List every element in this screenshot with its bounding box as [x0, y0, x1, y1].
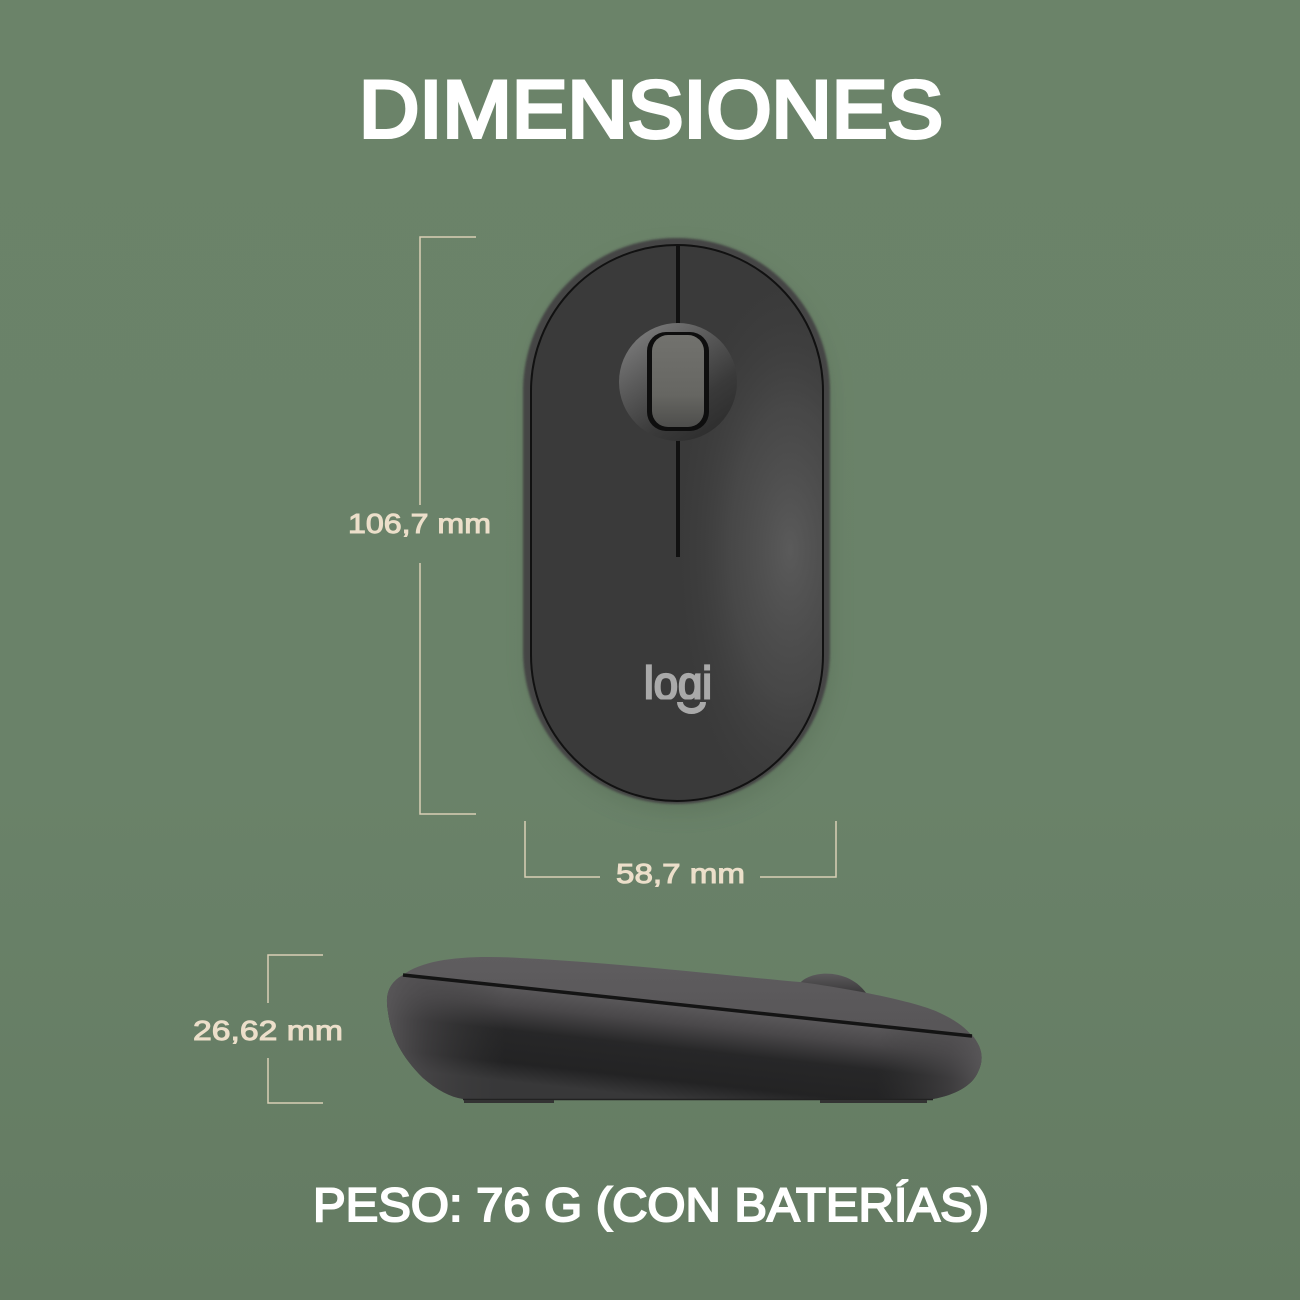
centre seam [676, 246, 680, 557]
wheel bump [798, 974, 868, 996]
side view mouse [380, 957, 990, 1105]
scroll wheel [652, 335, 704, 427]
seam line [403, 975, 972, 1036]
base line [463, 1098, 933, 1100]
top view mouse [522, 236, 832, 806]
shell highlight [718, 374, 822, 726]
shell outline [531, 245, 823, 801]
top shell [403, 957, 972, 1036]
thickness dimension bracket [268, 955, 323, 1103]
height label: 106,7 mm [348, 508, 491, 539]
width label: 58,7 mm [616, 858, 745, 889]
weight caption: PESO: 76 G (CON BATERÍAS) [313, 1178, 989, 1231]
title: DIMENSIONES [359, 65, 943, 155]
thickness label: 26,62 mm [193, 1015, 343, 1046]
width dimension bracket [525, 821, 836, 877]
feet [464, 1100, 927, 1103]
logo: logi [644, 657, 712, 709]
wheel socket [647, 332, 709, 431]
lower body [386, 975, 982, 1099]
height dimension bracket [420, 237, 476, 814]
mouse top shell [531, 245, 823, 801]
mouse body outer [523, 238, 830, 804]
scroll ring [619, 323, 737, 441]
